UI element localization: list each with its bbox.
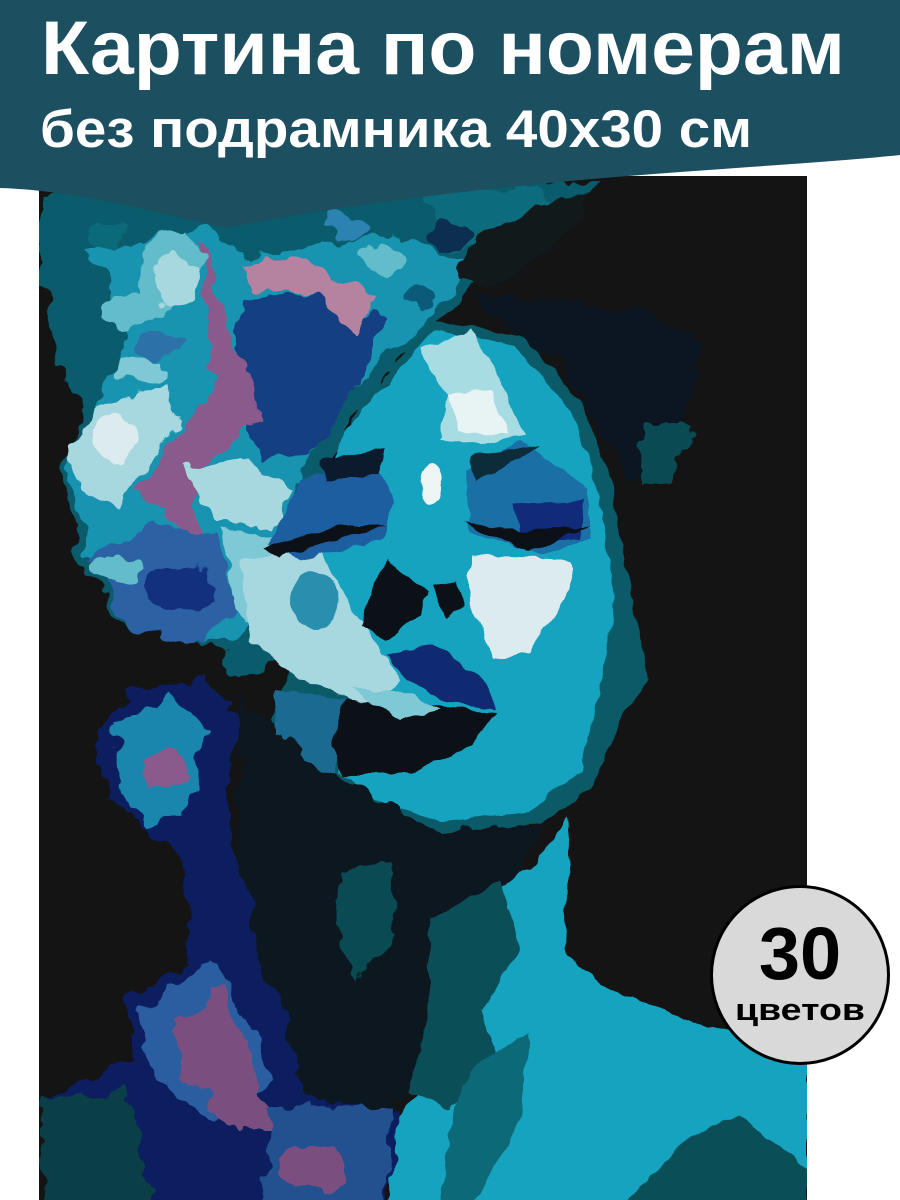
- painting: woman portrait in blue paint-by-numbers style: [39, 176, 807, 1200]
- hair and smoke mass, upper left: [39, 180, 600, 680]
- subtitle: без подрамника 40х30 см: [40, 100, 752, 159]
- header banner: [0, 0, 900, 228]
- neck shadow: [240, 700, 540, 1110]
- badge label: цветов: [735, 992, 865, 1027]
- forehead highlight: [420, 330, 525, 445]
- hair bun, upper right: [470, 300, 700, 480]
- badge number: 30: [759, 912, 841, 995]
- face shadow rim: [270, 320, 650, 835]
- smoke over cheek: [240, 550, 400, 710]
- left eye with blue shadow: [268, 472, 394, 560]
- title: Картина по номерам: [41, 6, 845, 91]
- nose highlight: [420, 463, 442, 507]
- right eye with blue shadow: [465, 440, 590, 555]
- lips: [385, 645, 498, 710]
- neck and shoulder light: [385, 815, 807, 1200]
- lower left cheek shadow: [273, 690, 346, 774]
- lower hair, deep blue and purple: [39, 680, 400, 1200]
- badge: 30 colours: [712, 886, 888, 1064]
- nose shadow: [360, 560, 425, 640]
- face: [240, 330, 615, 822]
- cheek highlight: [470, 555, 570, 660]
